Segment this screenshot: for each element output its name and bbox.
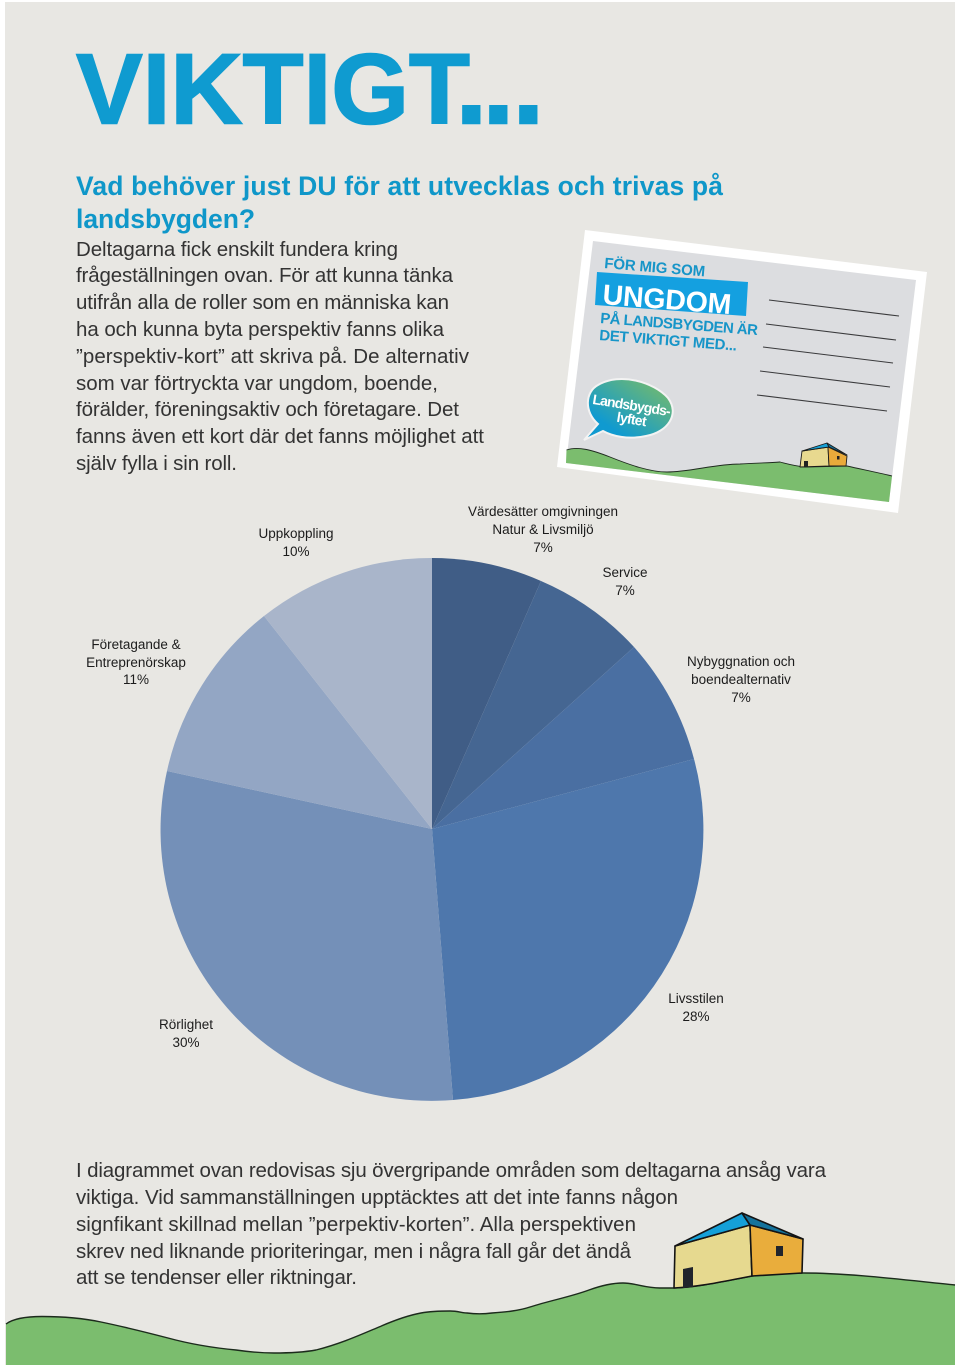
label: Uppkoppling: 10%: [282, 544, 310, 559]
intro text block: fanns även ett kort där det fanns möjlighet att: [76, 425, 484, 448]
closing text block: skrev ned liknande prioriteringar, men i några fall går det ändå: [76, 1240, 632, 1263]
label: Service: [602, 565, 648, 598]
slice: Livsstilen 28%: [432, 759, 703, 1100]
title: [76, 12, 546, 151]
title: ...: [454, 12, 546, 151]
label: Rörlighet: Rörlighet: [159, 1017, 213, 1032]
house roof side: [742, 1213, 803, 1239]
label: Uppkoppling: [258, 526, 334, 559]
label: Nybyggnation: Nybyggnation och: [687, 654, 795, 669]
house window: [776, 1246, 783, 1256]
label: Uppkoppling: Uppkoppling: [258, 526, 334, 541]
label: Företagande: Företagande &: [91, 637, 181, 652]
pie chart: [161, 558, 703, 1101]
label: Nybyggnation: 7%: [731, 690, 751, 705]
postcard face: [566, 241, 916, 502]
house front wall: [674, 1225, 752, 1288]
postcard frame: [557, 230, 927, 513]
slice: Nybyggnation 7%: [432, 647, 694, 829]
slice: Företagande 11%: [167, 616, 432, 829]
label: Värdesätter omgivningen: 7%: [533, 540, 553, 555]
label: Företagande: Entreprenörskap: [86, 655, 186, 670]
intro text block: ha och kunna byta perspektiv fanns olika: [76, 318, 445, 341]
slice: Service 7%: [432, 581, 634, 829]
postcard house: [800, 443, 847, 467]
label: Livsstilen: Livsstilen: [668, 991, 724, 1006]
closing text block: signfikant skillnad mellan ”perpektiv-korten”. Alla perspektiven: [76, 1213, 636, 1236]
label: Livsstilen: [668, 991, 724, 1024]
intro text block: Deltagarna fick enskilt fundera kring: [76, 238, 398, 261]
postcard prompt: DET VIKTIGT MED...: [599, 327, 738, 355]
hill: [6, 1273, 955, 1365]
postcard prompt: [599, 310, 759, 355]
intro text block: som var förtryckta var ungdom, boende,: [76, 372, 438, 395]
label: Företagande: [86, 637, 186, 687]
heading: Vad behöver just DU för att utvecklas och trivas på: [76, 171, 723, 201]
slice: Värdesätter omgivningen 7%: [432, 558, 541, 829]
house side wall: [750, 1225, 803, 1276]
label: Livsstilen: 28%: [682, 1009, 710, 1024]
postcard hill: [566, 448, 892, 502]
label: Service: Service: [602, 565, 648, 580]
intro text block: själv fylla i sin roll.: [76, 452, 237, 475]
label: Värdesätter omgivningen: [468, 504, 618, 555]
label: Företagande: 11%: [123, 672, 149, 687]
logo speech bubble: [584, 379, 673, 440]
slice: Uppkoppling 10%: [264, 558, 432, 829]
role label box: UNGDOM: [601, 279, 733, 321]
closing text block: att se tendenser eller riktningar.: [76, 1266, 357, 1289]
intro text block: ”perspektiv-kort” att skriva på. De alternativ: [76, 345, 470, 368]
write-in lines: [757, 300, 899, 411]
logo speech bubble: lyftet: [616, 409, 648, 429]
intro text block: [76, 238, 484, 475]
label: Nybyggnation: boendealternativ: [691, 672, 791, 687]
intro text block: frågeställningen ovan. För att kunna tänka: [76, 264, 454, 287]
intro text block: utifrån alla de roller som en människa kan: [76, 291, 449, 314]
intro text block: förälder, föreningsaktiv och företagare. Det: [76, 398, 459, 421]
postcard heading: FÖR MIG SOM: [604, 255, 706, 280]
heading: landsbygden?: [76, 204, 255, 234]
label: Rörlighet: [159, 1017, 213, 1050]
heading: [76, 171, 723, 234]
hill outline: [6, 1273, 955, 1353]
closing text block: viktiga. Vid sammanställningen upptäcktes att det inte fanns någon: [76, 1186, 678, 1209]
logo speech bubble: Landsbygds-: [592, 391, 672, 419]
title: VIKTIGT: [76, 34, 470, 146]
slice: Rörlighet 30%: [161, 771, 453, 1101]
house roof front: [675, 1213, 750, 1246]
label: Rörlighet: 30%: [172, 1035, 200, 1050]
postcard hill outline: [566, 448, 892, 476]
label: Värdesätter omgivningen: Värdesätter omgivningen: [468, 504, 618, 519]
house: [674, 1213, 803, 1288]
house door: [683, 1267, 693, 1288]
closing text block: I diagrammet ovan redovisas sju övergripande områden som deltagarna ansåg vara: [76, 1159, 827, 1182]
postcard prompt: PÅ LANDSBYGDEN ÄR: [600, 310, 759, 339]
closing text block: [76, 1159, 827, 1289]
label: Värdesätter omgivningen: Natur & Livsmiljö: [492, 522, 594, 537]
postcard illustration: [557, 230, 927, 513]
label: Service: 7%: [615, 583, 635, 598]
label: Nybyggnation: [687, 654, 795, 705]
